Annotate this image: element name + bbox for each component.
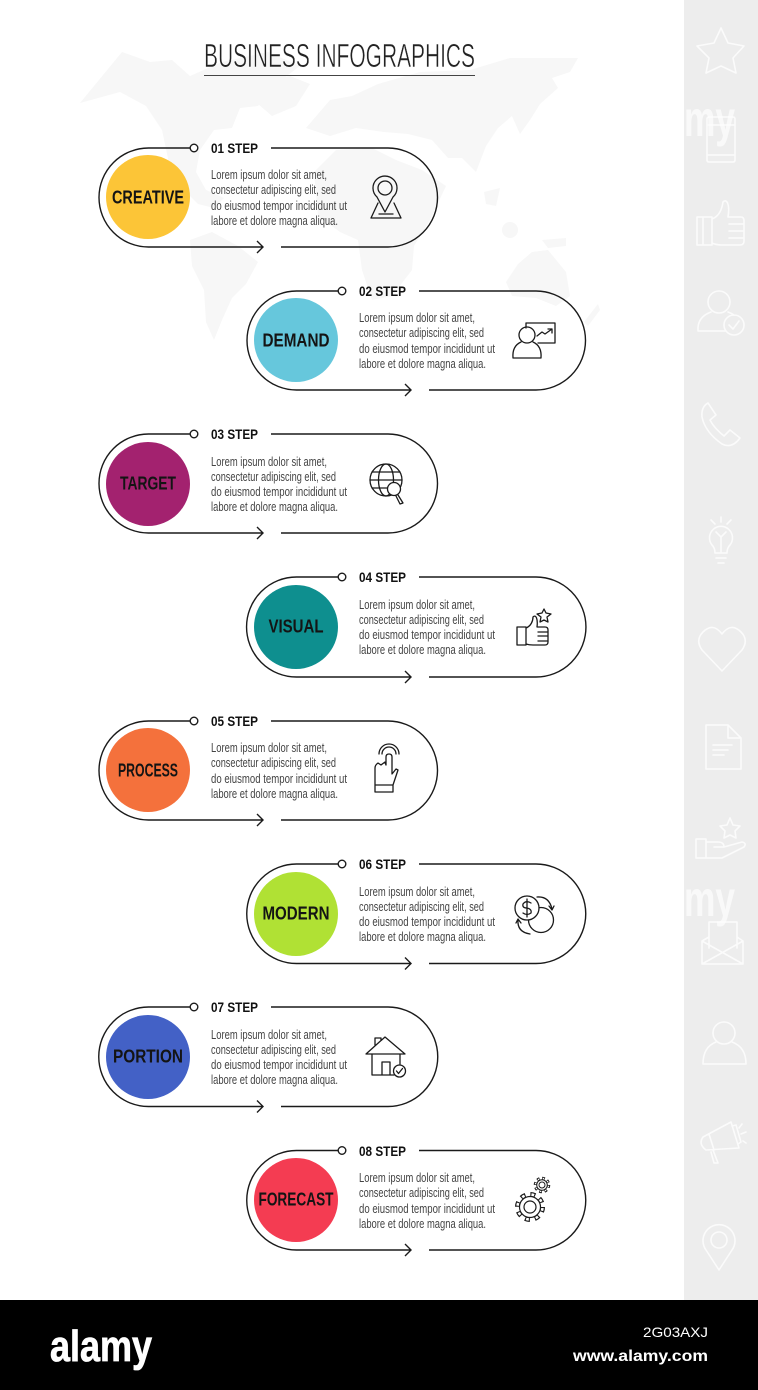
footer bar [0, 1300, 758, 1390]
text block: consectetur adipiscing elit, sed [359, 899, 484, 914]
icon: document [706, 725, 741, 769]
text block: consectetur adipiscing elit, sed [211, 1042, 336, 1057]
panel: step 06 modern [247, 856, 586, 970]
text block: do eiusmod tempor incididunt ut [211, 1057, 347, 1072]
icon: envelope [702, 922, 743, 964]
sidebar panel [684, 0, 758, 1300]
panel: step 01 creative: CREATIVE [112, 188, 184, 208]
icon: house check [366, 1037, 406, 1077]
icon: megaphone [701, 1122, 746, 1163]
text block: Lorem ipsum dolor sit amet, [211, 167, 327, 182]
label circle [254, 585, 338, 669]
text block: labore et dolore magna aliqua. [211, 786, 338, 801]
panel: step 07 portion: PORTION [113, 1046, 183, 1066]
text block: Lorem ipsum dolor sit amet, [359, 597, 475, 612]
panel: step 02 demand: DEMAND [262, 330, 330, 350]
text block [359, 310, 495, 371]
text block [211, 454, 347, 514]
title: BUSINESS INFOGRAPHICS [204, 37, 475, 74]
text block: do eiusmod tempor incididunt ut [211, 771, 347, 786]
text block: Lorem ipsum dolor sit amet, [359, 1170, 475, 1185]
text block: labore et dolore magna aliqua. [359, 642, 486, 657]
icon: touch hand [375, 744, 399, 792]
panel: step 01 creative [99, 140, 438, 253]
step label: 02 STEP [359, 283, 406, 299]
icon: thumbs up with star [517, 609, 551, 645]
panel: step 03 target: TARGET [120, 474, 176, 494]
step label: 03 STEP [211, 426, 258, 442]
text block: consectetur adipiscing elit, sed [211, 469, 336, 484]
label circle [254, 1158, 338, 1242]
panel: step 05 process: PROCESS [118, 760, 178, 780]
text block [359, 884, 495, 944]
icon: phone [702, 403, 740, 446]
panel: step 02 demand [247, 283, 586, 396]
step label: 07 STEP [211, 999, 258, 1015]
label circle [254, 872, 338, 956]
text block: labore et dolore magna aliqua. [211, 499, 338, 514]
text block: do eiusmod tempor incididunt ut [359, 914, 495, 929]
icon: globe search [370, 464, 403, 504]
text block: consectetur adipiscing elit, sed [211, 755, 336, 770]
text block: labore et dolore magna aliqua. [359, 356, 486, 371]
panel: step 04 visual [247, 569, 586, 683]
logo: alamy [50, 1322, 152, 1371]
icon: hand with star [696, 818, 745, 858]
panel: step 05 process [99, 713, 438, 826]
step label: 05 STEP [211, 713, 258, 729]
panel: step 03 target [99, 426, 438, 539]
step label: 08 STEP [359, 1143, 406, 1159]
image id: 2G03AXJ [643, 1324, 708, 1340]
watermark fragment: my [684, 91, 735, 147]
icon: map pin [371, 176, 401, 218]
text block: labore et dolore magna aliqua. [359, 929, 486, 944]
step label: 01 STEP [211, 140, 258, 156]
text block: labore et dolore magna aliqua. [359, 1216, 486, 1231]
icon: map pin [703, 1225, 735, 1270]
panel: step 06 modern: MODERN [262, 904, 330, 924]
text block: labore et dolore magna aliqua. [211, 213, 338, 228]
panel: step 04 visual: VISUAL [268, 616, 324, 636]
watermark fragment lower: my [684, 871, 735, 927]
label circle [106, 155, 190, 239]
text block [211, 167, 347, 228]
icon: tablet [707, 117, 735, 162]
text block: do eiusmod tempor incididunt ut [359, 627, 495, 642]
text block: Lorem ipsum dolor sit amet, [211, 454, 327, 469]
text block: Lorem ipsum dolor sit amet, [359, 884, 475, 899]
text block: do eiusmod tempor incididunt ut [359, 1201, 495, 1216]
label circle [106, 1015, 190, 1099]
icon: coins exchange [515, 896, 554, 934]
text block: consectetur adipiscing elit, sed [359, 325, 484, 340]
text block: consectetur adipiscing elit, sed [359, 612, 484, 627]
text block [211, 1027, 347, 1087]
step label: 04 STEP [359, 569, 406, 585]
panel: step 07 portion [99, 999, 438, 1112]
label circle [106, 442, 190, 526]
icon: person [703, 1022, 746, 1064]
text block: labore et dolore magna aliqua. [211, 1072, 338, 1087]
text block [211, 740, 347, 801]
text block: do eiusmod tempor incididunt ut [211, 484, 347, 499]
panel: step 08 forecast: FORECAST [258, 1190, 334, 1210]
world map background [80, 52, 600, 340]
website: www.alamy.com [572, 1348, 708, 1365]
icon: presenter [513, 323, 555, 358]
text block: Lorem ipsum dolor sit amet, [211, 1027, 327, 1042]
step label: 06 STEP [359, 856, 406, 872]
text block: do eiusmod tempor incididunt ut [211, 198, 347, 213]
icon: heart [699, 627, 745, 671]
label circle [254, 298, 338, 382]
icon: light bulb [710, 517, 732, 563]
text block: consectetur adipiscing elit, sed [211, 182, 336, 197]
text block [359, 1170, 495, 1231]
text block: Lorem ipsum dolor sit amet, [211, 740, 327, 755]
text block: consectetur adipiscing elit, sed [359, 1185, 484, 1200]
text block: do eiusmod tempor incididunt ut [359, 341, 495, 356]
icon: user check [698, 291, 744, 335]
label circle [106, 728, 190, 812]
icon: gears [518, 1178, 548, 1220]
icon: star [697, 28, 744, 73]
panel: step 08 forecast [247, 1143, 586, 1256]
icon: thumbs up [697, 201, 744, 245]
text block [359, 597, 495, 657]
text block: Lorem ipsum dolor sit amet, [359, 310, 475, 325]
